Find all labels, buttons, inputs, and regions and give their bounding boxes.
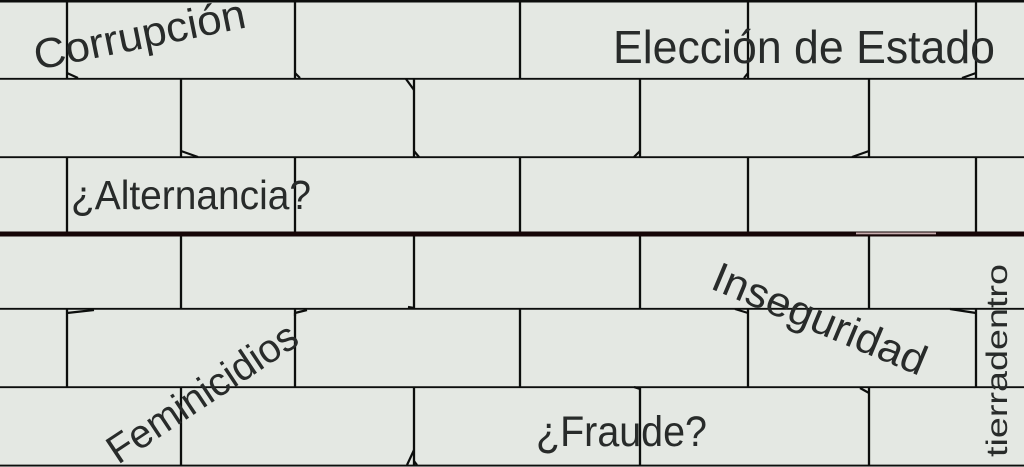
label: Elección de Estado: Elección de Estado — [613, 21, 995, 73]
label: ¿Fraude?: ¿Fraude? — [536, 408, 707, 456]
label: ¿Alternancia?: ¿Alternancia? — [71, 172, 311, 218]
thick central line — [0, 232, 1024, 236]
label: Inseguridad: Inseguridad — [706, 253, 934, 384]
label: tierradentro: tierradentro — [981, 264, 1014, 457]
pink highlight on central line — [856, 232, 936, 234]
